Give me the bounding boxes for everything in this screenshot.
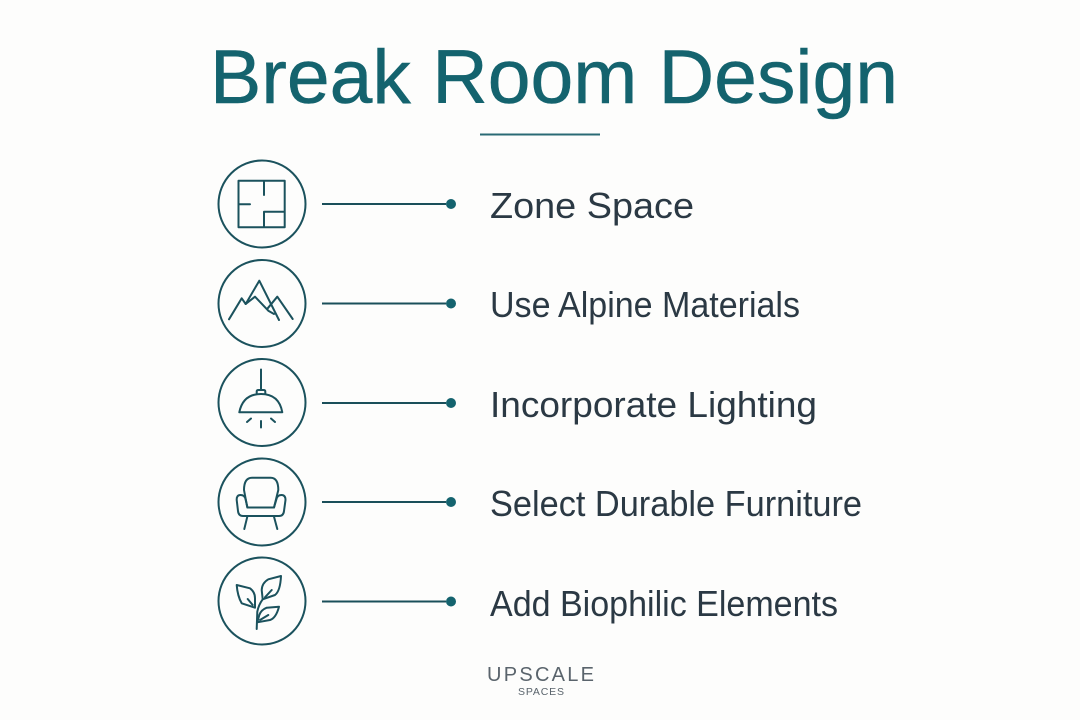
connector: Select Durable Furniture	[322, 497, 456, 507]
icon: plant	[218, 558, 306, 644]
logo: Upscale Spaces	[487, 664, 594, 698]
row: Use Alpine Materials	[218, 260, 800, 347]
connector: Incorporate Lighting	[322, 398, 456, 408]
title: Break Room Design	[210, 35, 898, 120]
label: Zone Space: Zone Space	[490, 185, 694, 226]
logo: Upscale Spaces: SPACES	[518, 686, 564, 698]
connector: Zone Space	[322, 199, 456, 209]
icon: floor plan	[218, 160, 306, 248]
row: Select Durable Furniture	[218, 458, 862, 546]
logo: Upscale Spaces: UPSCALE	[487, 664, 594, 686]
icon: pendant lamp	[218, 359, 306, 446]
icon: armchair	[218, 458, 306, 546]
label: Use Alpine Materials: Use Alpine Materials	[490, 284, 800, 325]
label: Add Biophilic Elements: Add Biophilic Elements	[490, 583, 838, 624]
row: Zone Space	[218, 160, 694, 248]
icon: mountains	[218, 260, 306, 347]
row: Incorporate Lighting	[218, 359, 817, 446]
connector: Add Biophilic Elements	[322, 596, 456, 606]
row: Add Biophilic Elements	[218, 558, 838, 644]
label: Select Durable Furniture: Select Durable Furniture	[490, 483, 862, 524]
label: Incorporate Lighting: Incorporate Lighting	[490, 384, 817, 425]
connector: Use Alpine Materials	[322, 298, 456, 308]
